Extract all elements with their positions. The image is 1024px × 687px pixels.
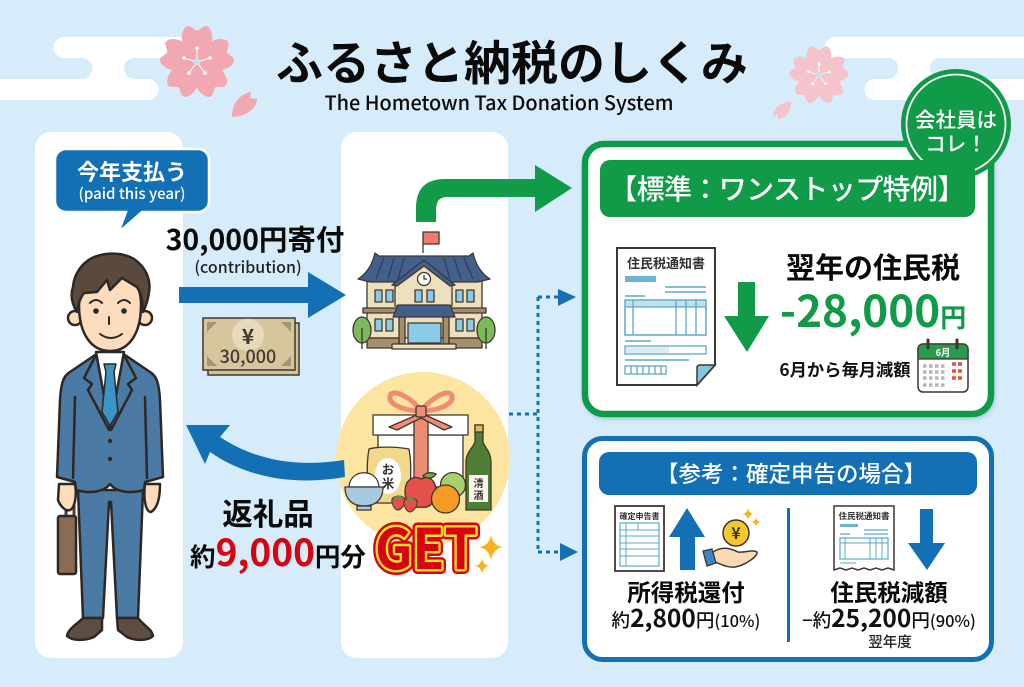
arrow: green down: [724, 282, 769, 352]
arrow: donation to municipality: [179, 272, 346, 318]
icon: resident tax notice: [834, 506, 894, 570]
label: return gift: 約9,000円分: [190, 523, 366, 577]
panel: standard one-stop contents: [600, 160, 975, 392]
icon: rice bag: [367, 447, 411, 503]
arrow: blue down: [908, 509, 945, 570]
shoes: [67, 618, 153, 640]
panel: reference tax return: [584, 438, 992, 660]
icon: cherry blossom left: [158, 26, 236, 100]
label: 30,000 yen contribution: (contribution): [194, 254, 302, 278]
icon: sake bottle: [466, 425, 491, 510]
icon: coin over hand: [703, 508, 760, 567]
icon: banknotes: 30,000: [220, 343, 276, 369]
icon: coin over hand: ¥: [731, 520, 741, 544]
icon: briefcase: [58, 503, 76, 574]
text: minus 28,000 yen: -28,000円: [780, 276, 966, 340]
facial features: [90, 300, 130, 338]
buttons: [108, 439, 112, 443]
icon: tax return form: 確定申告書: [620, 511, 660, 522]
tie: [102, 364, 118, 426]
icon: tax return form: [615, 506, 664, 571]
icon: town hall building: [353, 232, 495, 349]
icon: orange: [432, 485, 460, 513]
speech bubble: paid this year: [55, 149, 209, 233]
icon: green apple: [440, 472, 466, 498]
ears: [68, 311, 82, 325]
speech bubble: paid this year: 今年支払う: [77, 155, 187, 187]
badge: for company employees: コレ！: [925, 127, 987, 157]
icon: banknotes: ¥: [242, 321, 255, 351]
header: tax return: 【参考：確定申告の場合】: [656, 457, 926, 489]
icon: gift box with ribbon: [373, 393, 468, 487]
illustration: businessman: [57, 254, 163, 640]
text: income tax refund: 約2,800円(10%): [612, 600, 760, 635]
subtitle: The Hometown Tax Donation System: [325, 87, 673, 116]
hands: [58, 484, 160, 512]
badge: GET: GET: [375, 505, 477, 586]
icon: rice bag: 米: [382, 473, 395, 492]
icon: sparkles: [475, 535, 503, 574]
icon: June calendar: [918, 340, 968, 392]
decoration: left cloud: [0, 37, 190, 100]
text: monthly reduction from June: 6月から毎月減額: [779, 356, 911, 381]
divider: [787, 508, 790, 642]
jacket and sleeves: [57, 355, 163, 492]
header: one-stop: [600, 160, 975, 217]
icon: resident tax notice: 住民税通知書: [838, 510, 890, 522]
icon: rice bowl: [345, 473, 383, 510]
lapels: [84, 355, 136, 430]
badge: GET: GET: [375, 505, 477, 586]
hair: [72, 254, 149, 312]
badge: GET: GET: [375, 505, 477, 586]
text: resident tax reduction: 住民税減額: [830, 574, 948, 608]
icon: falling petal left: [232, 92, 257, 117]
panel: standard one-stop frame: [585, 144, 991, 414]
icon: rice bag: お: [382, 459, 395, 478]
decoration: right cloud: [825, 37, 1024, 100]
text: resident tax reduction: [802, 574, 976, 652]
arrow: return gift to donor: [186, 425, 345, 480]
icon: banknotes: [203, 318, 299, 375]
sleeve lines: [73, 397, 147, 478]
trousers: [78, 490, 143, 618]
arrow: green curved arrow to one-stop: [416, 165, 572, 222]
text: income tax refund: 所得税還付: [627, 574, 745, 608]
text: income tax refund: [612, 574, 760, 635]
connector: dotted lines: [509, 289, 578, 561]
icon: tax notice document: 住民税通知書: [627, 253, 705, 272]
arrow: blue up: [669, 508, 705, 570]
text: next year resident tax: 翌年の住民税: [786, 245, 960, 287]
badge: for company employees: 会社員は: [915, 103, 997, 133]
speech bubble: paid this year: (paid this year): [79, 183, 185, 204]
header: tax return: [599, 452, 977, 495]
icon: strawberries: [392, 495, 417, 512]
icon: tax notice document: [617, 248, 715, 385]
panel: middle column background: [341, 132, 508, 658]
icon: apple: [405, 473, 436, 507]
text: resident tax reduction: −約25,200円(90%): [802, 600, 976, 635]
panel: left column background: [35, 132, 183, 658]
circle: return gift background: [336, 372, 510, 546]
header: one-stop: 【標準：ワンストップ特例】: [609, 168, 965, 208]
label: 30,000 yen contribution: [166, 218, 344, 278]
title: ふるさと納税のしくみ: [276, 25, 748, 94]
icon: sake bottle: 酒: [474, 487, 484, 502]
badge: for company employees: [901, 69, 1011, 179]
label: return gift: 返礼品: [222, 490, 314, 534]
icon: sake bottle: 清: [474, 475, 484, 490]
icon: falling petal right: [773, 102, 791, 119]
shirt and collar: [96, 352, 124, 428]
face: [79, 272, 141, 351]
text: resident tax reduction: 翌年度: [868, 631, 912, 652]
icon: June calendar: 6月: [935, 345, 951, 359]
icon: cherry blossom right: [788, 46, 850, 105]
label: 30,000 yen contribution: 30,000円寄付: [166, 218, 344, 259]
label: return gift: [190, 490, 366, 577]
